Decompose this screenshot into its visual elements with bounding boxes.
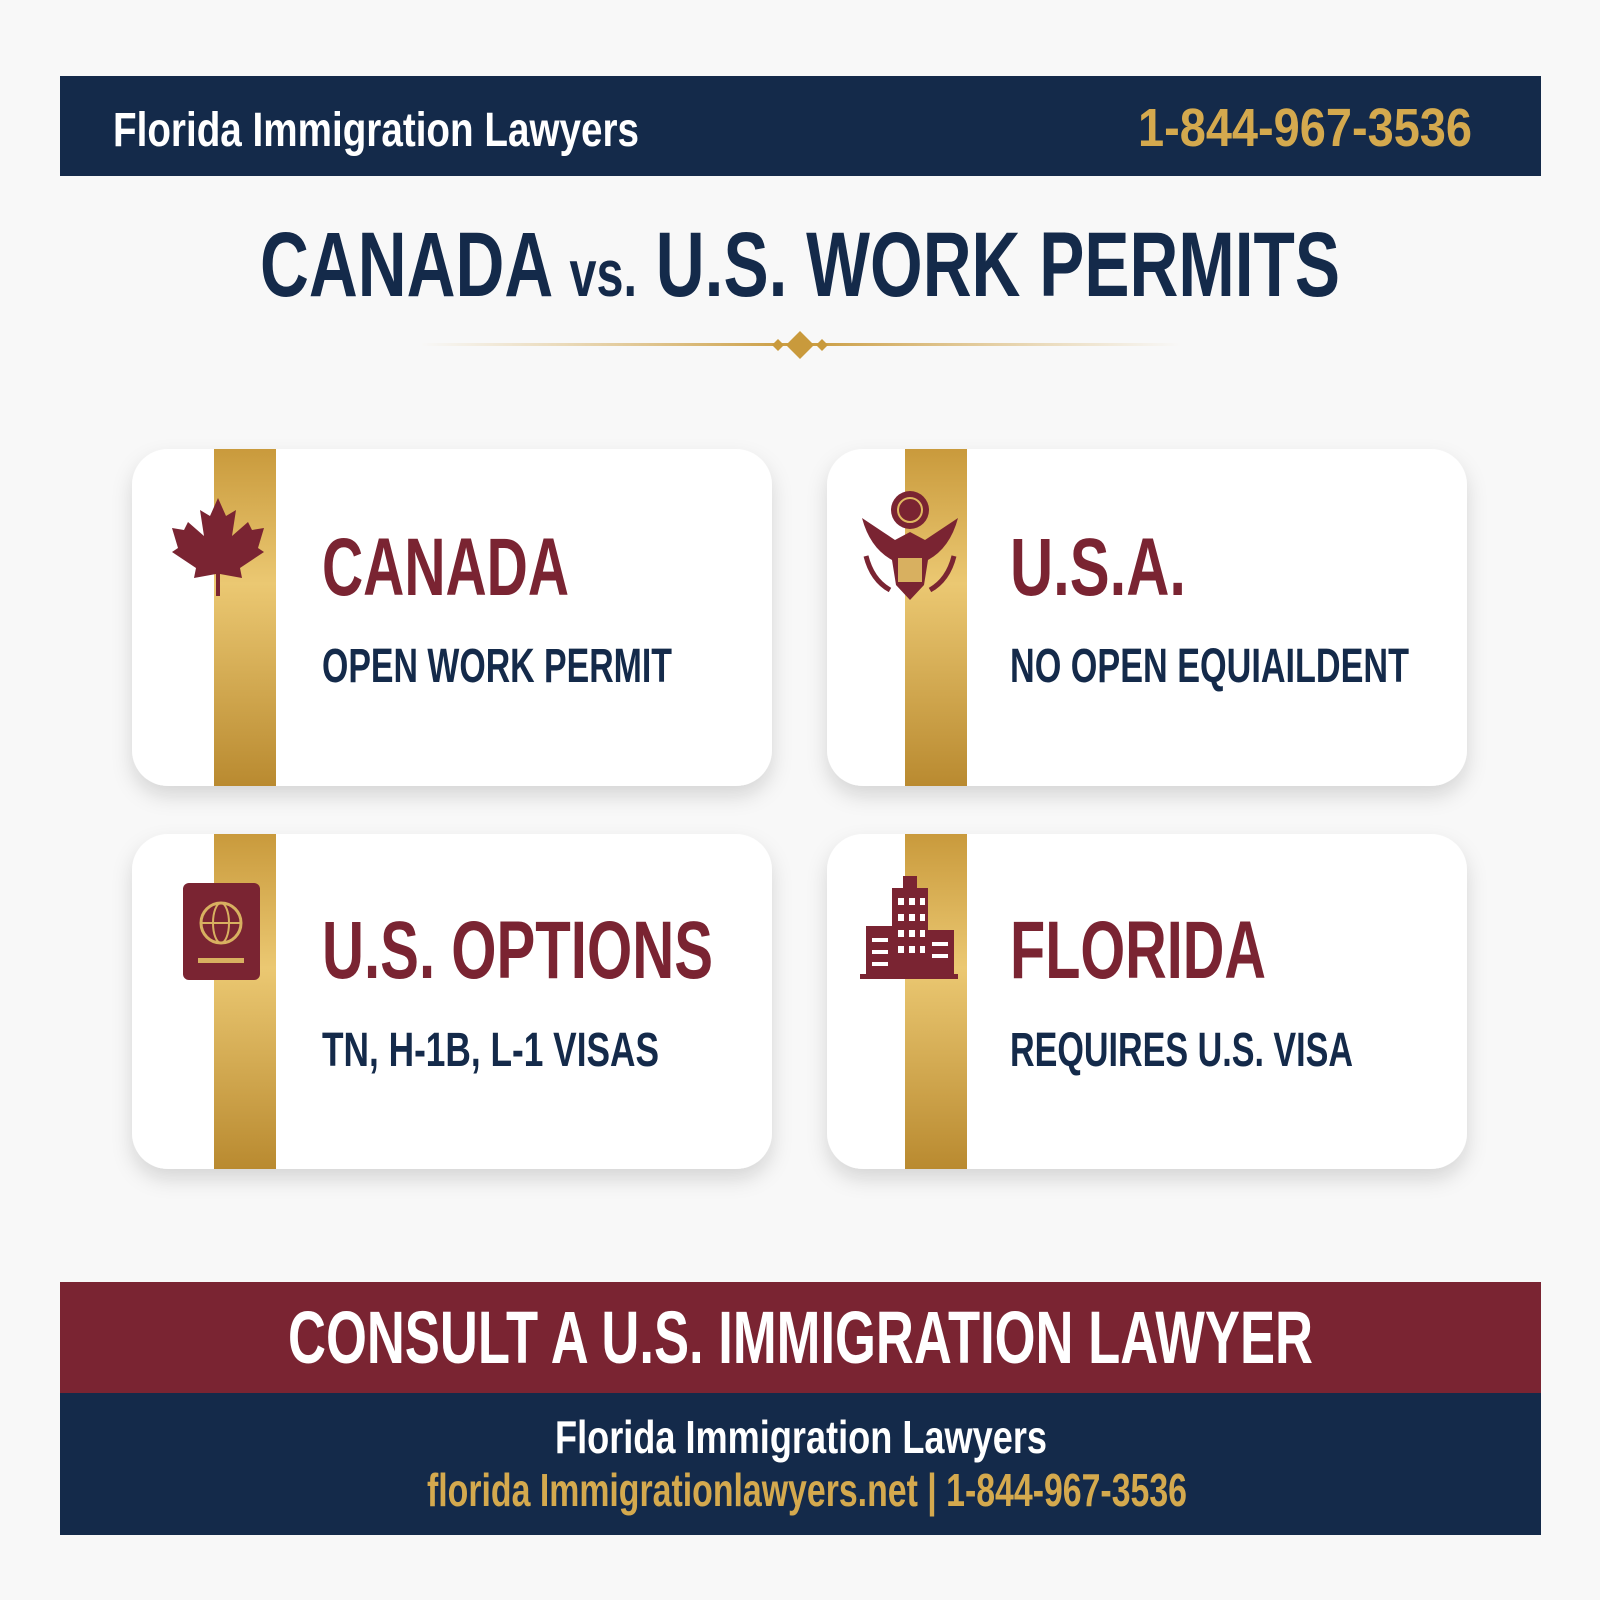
divider ornament (420, 331, 1181, 359)
header bar: 1-844-967-3536 (1138, 98, 1472, 158)
panel: florida: REQUIRES U.S. VISA (1010, 1024, 1353, 1077)
panel: us options: U.S. OPTIONS (322, 905, 713, 996)
panel: us options: TN, H-1B, L-1 VISAS (322, 1024, 659, 1077)
footer contact (60, 1393, 1541, 1535)
panel: canada: OPEN WORK PERMIT (322, 640, 672, 693)
panel: canada: CANADA (322, 522, 569, 613)
icon: eagle seal (862, 491, 958, 600)
panel: canada (132, 449, 772, 786)
header bar (60, 76, 1541, 176)
icon: buildings (860, 876, 958, 979)
title: CANADA vs. U.S. WORK PERMITS (260, 214, 1340, 316)
icon: maple leaf (172, 498, 264, 596)
icon: passport (183, 883, 260, 980)
footer contact: Florida Immigration Lawyers (555, 1411, 1047, 1463)
panel: usa: U.S.A. (1010, 522, 1186, 613)
panel: florida: FLORIDA (1010, 905, 1266, 996)
panel: usa (827, 449, 1467, 786)
panel: usa: NO OPEN EQUIAILDENT (1010, 640, 1409, 693)
panel: florida (827, 834, 1467, 1169)
panel: us options (132, 834, 772, 1169)
cta banner (60, 1282, 1541, 1394)
footer contact: florida Immigrationlawyers.net | 1-844-967-3536 (427, 1464, 1187, 1516)
header bar: Florida Immigration Lawyers (113, 104, 639, 157)
